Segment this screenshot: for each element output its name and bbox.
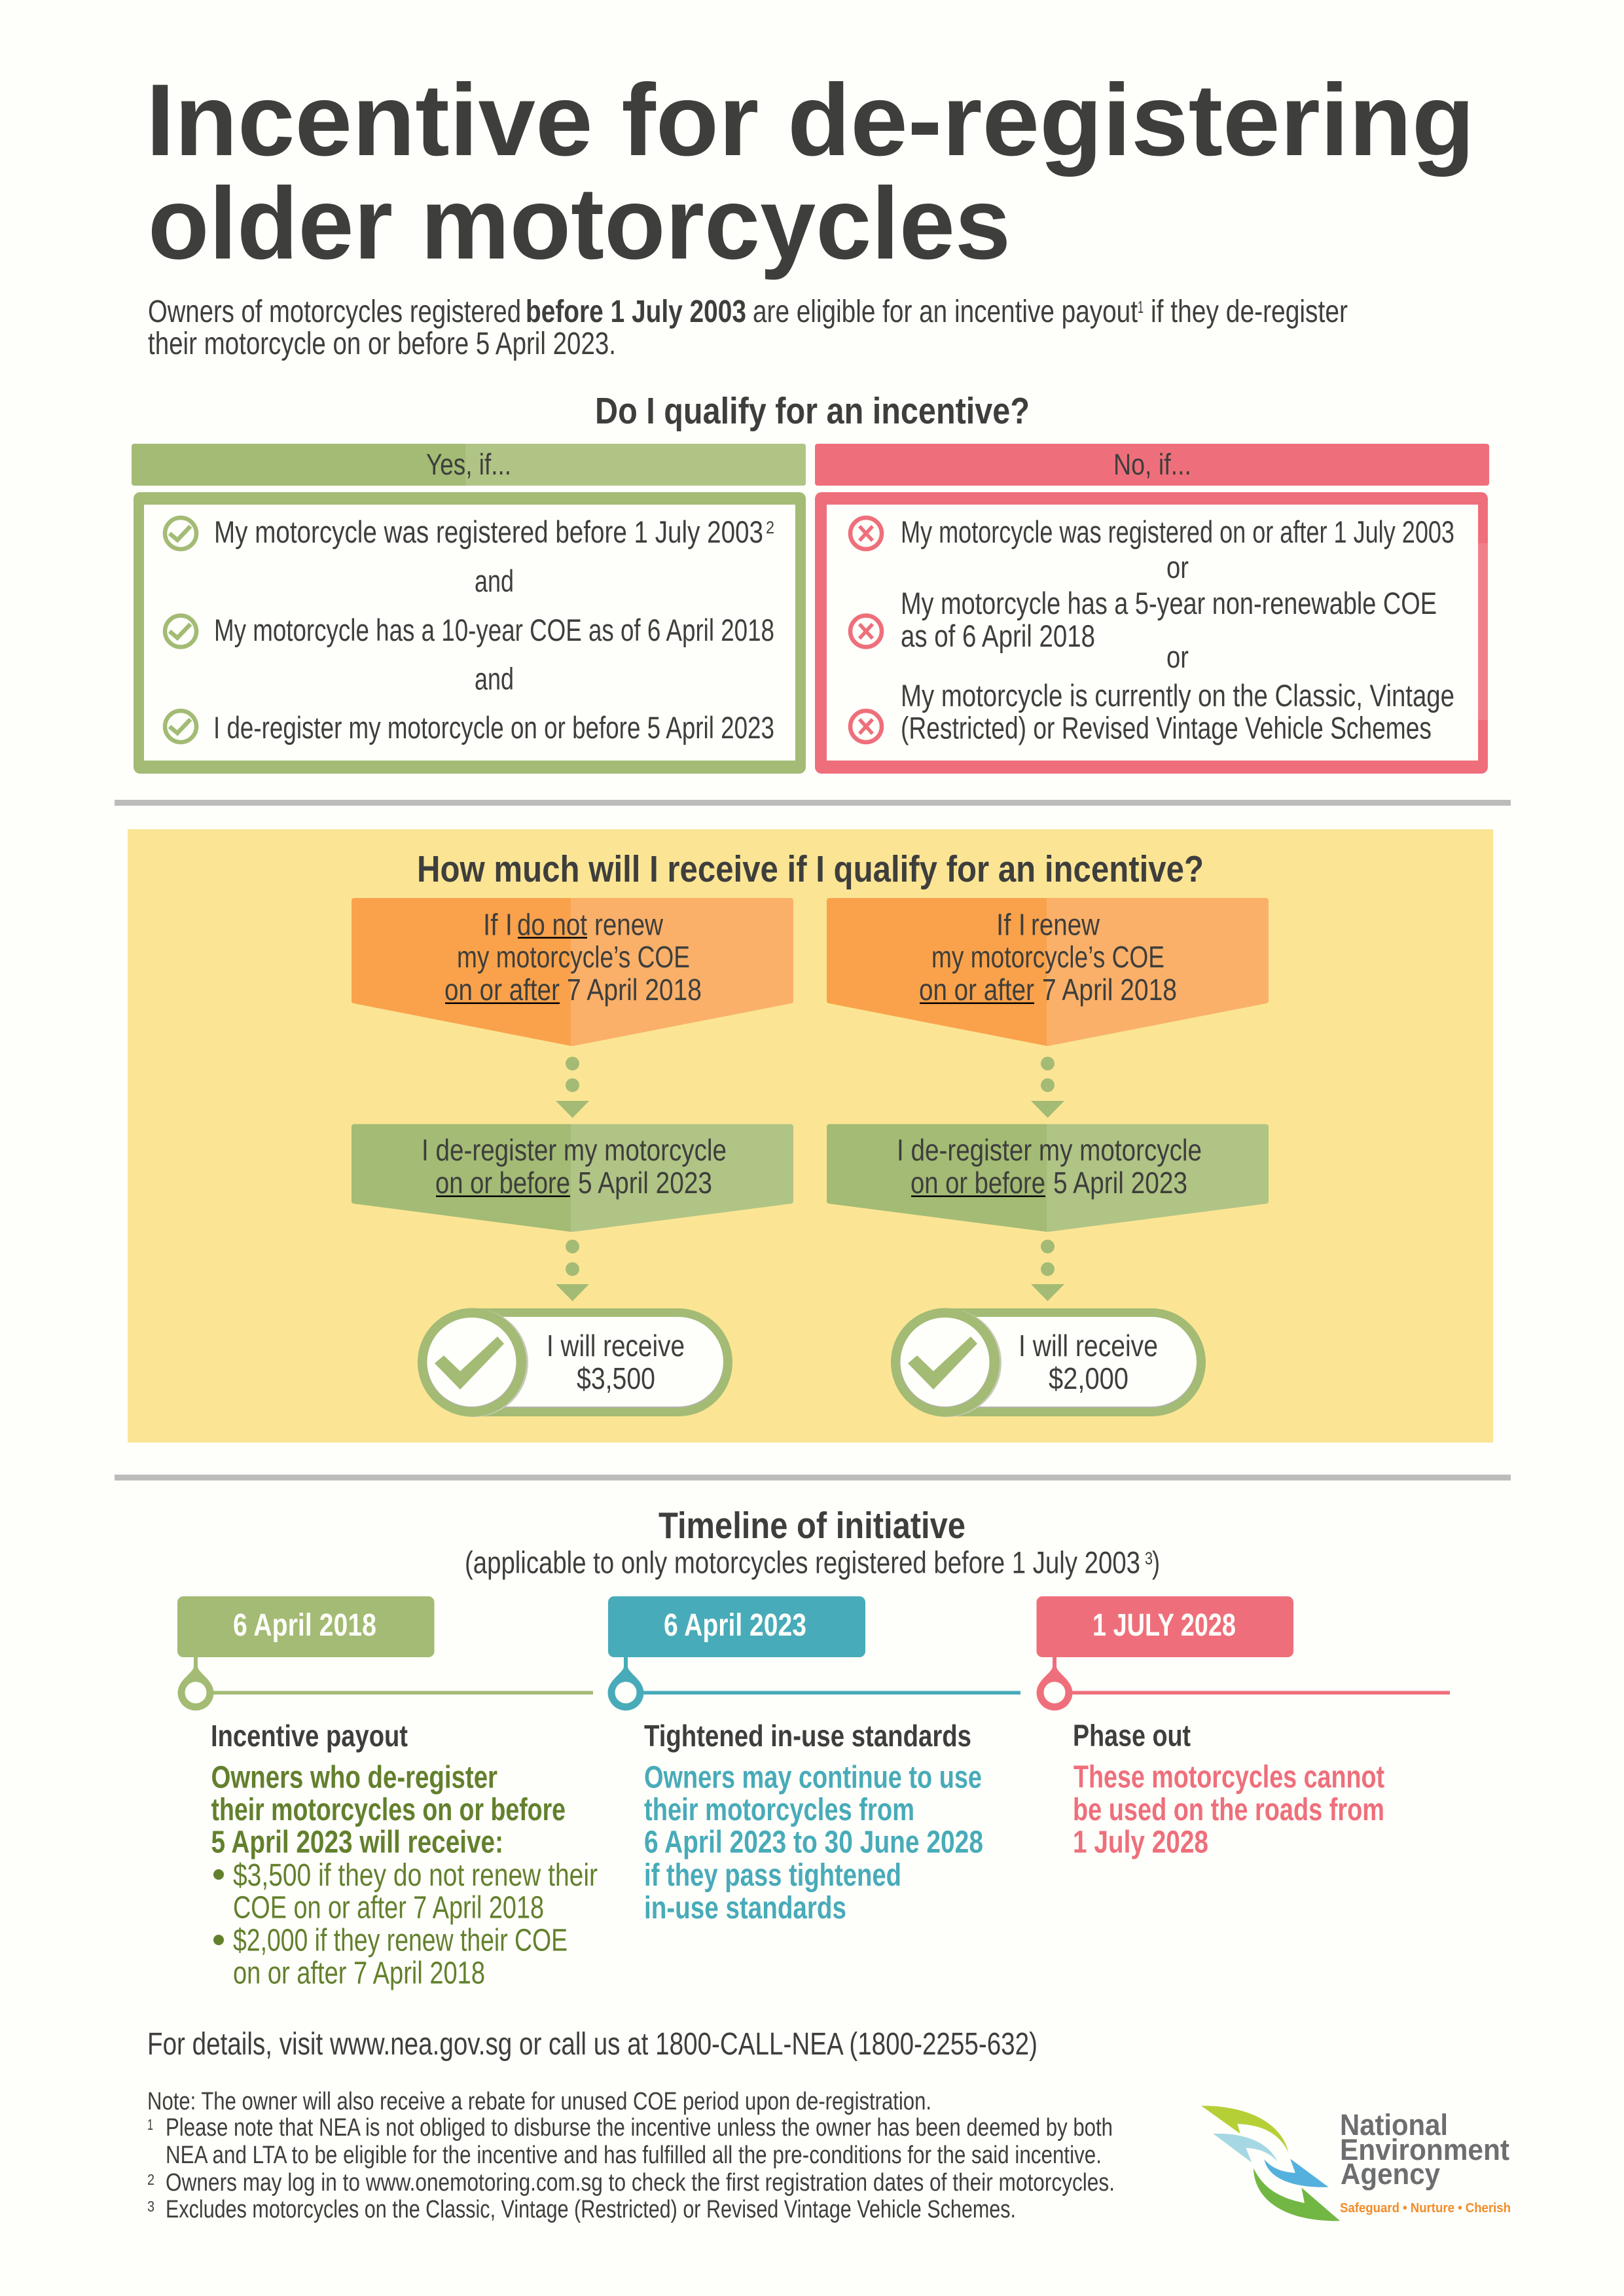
logo wordmark: Agency [1341,2157,1440,2191]
result pill: $2,000: $2,000 [1049,1361,1128,1395]
panel: how much [128,829,1493,1443]
timeline: 1 July 2028 [1037,1596,1450,1860]
pin and line [1037,1656,1450,1711]
date tag [177,1596,435,1657]
date tag [608,1596,865,1657]
condition 3: My motorcycle is currently on the Classic, Vintage [901,678,1454,713]
condition 1: My motorcycle was registered on or after 1 July 2003 [901,514,1454,549]
orange arrow box: If I [483,907,513,941]
footnotes: Excludes motorcycles on the Classic, Vintage (Restricted) or Revised Vintage Vehicle Schemes. [166,2196,1016,2223]
icon: check 2 [165,615,196,647]
icon: logo swirl [1201,2106,1340,2221]
icon: cross 2 [850,615,882,647]
result pill: $3,500 [418,1308,732,1417]
lead text [211,1761,566,1860]
heading: timeline [465,1505,1160,1580]
condition 2: My motorcycle has a 5-year non-renewable COE [901,586,1437,620]
result pill: $3,500: $3,500 [577,1361,655,1395]
green arrow box: on or before [435,1166,570,1200]
orange arrow box: renew [594,907,664,941]
heading: incentive payout: Incentive payout [211,1719,408,1753]
date tag [1037,1596,1293,1657]
title [146,63,1475,281]
title: Incentive for de-registering [146,63,1475,177]
no conditions box [815,492,1488,774]
green arrow box: on or before [911,1166,1045,1200]
contact line: For details, visit www.nea.gov.sg or call us at 1800-CALL-NEA (1800-2255-632) [147,2027,1038,2062]
green arrow box: 5 April 2023 [1053,1166,1187,1200]
date tag: 1 JULY 2028 [1092,1608,1236,1643]
orange arrow box: renew [1031,907,1100,941]
lead text: 1 July 2028 [1073,1825,1208,1860]
yes header bar [132,444,806,486]
intro text: are eligible for an incentive payout [753,295,1138,329]
arrow: dotted down [1031,1240,1064,1301]
lead text: 6 April 2023 to 30 June 2028 [644,1825,983,1860]
pin and line [178,1656,593,1711]
condition 3 [901,678,1454,745]
condition 2: My motorcycle has a 10-year COE as of 6 April 2018 [214,613,774,647]
orange arrow box: my motorcycle’s COE [931,940,1164,974]
title: older motorcycles [148,167,1011,281]
lead text: 5 April 2023 will receive: [211,1825,503,1860]
green arrow box: 5 April 2023 [578,1166,712,1200]
lead text: if they pass tightened [644,1858,901,1893]
orange arrow box: on or after [444,973,560,1007]
yes header bar: Yes, if... [426,448,511,481]
logo wordmark: Environment [1340,2133,1509,2166]
footnotes: NEA and LTA to be eligible for the incentive and has fulfilled all the pre-conditions for the said incentive. [166,2142,1102,2169]
bullets [213,1858,598,1991]
date tag: 6 April 2018 [233,1608,376,1643]
heading: timeline: ) [1152,1545,1160,1580]
orange arrow box: my motorcycle’s COE [457,940,690,974]
heading: how much: How much will I receive if I qualify for an incentive? [417,848,1204,890]
flow: left column [352,898,793,1417]
timeline: 6 April 2018 [177,1596,598,1991]
footnotes: Note: The owner will also receive a rebate for unused COE period upon de-registration. [147,2088,931,2115]
green arrow box: I de-register my motorcycle [897,1133,1202,1167]
green arrow box [827,1124,1269,1232]
green arrow box [352,1124,793,1232]
arrow: dotted down [1031,1056,1064,1118]
timeline: 6 April 2023 [607,1596,1020,1926]
footnotes: Please note that NEA is not obliged to disburse the incentive unless the owner has been deemed by both [166,2114,1113,2142]
icon: check 3 [165,711,196,742]
intro text: before 1 July 2003 [526,295,746,329]
orange arrow box: do not [517,907,587,941]
bullets: COE on or after 7 April 2018 [233,1890,544,1926]
lead text: These motorcycles cannot [1074,1760,1384,1795]
footnotes: 1 [147,2116,153,2133]
lead text [1073,1760,1384,1860]
heading: tightened standards: Tightened in-use standards [644,1719,971,1753]
footnotes: 2 [147,2171,154,2188]
yes conditions box: and [475,661,514,696]
footnotes [147,2088,1115,2223]
condition 1: 2 [766,518,774,537]
date tag: 6 April 2023 [664,1608,806,1643]
intro text: Owners of motorcycles registered [148,295,521,329]
heading: timeline: 3 [1145,1549,1153,1568]
intro text: 1 [1138,297,1144,317]
no conditions box: or [1166,550,1189,584]
icon: check 1 [165,518,196,549]
orange arrow box: on or after [919,973,1034,1007]
bullets: $3,500 if they do not renew their [233,1858,598,1893]
pin and line [607,1656,1020,1711]
result pill: $2,000: I will receive [1019,1329,1158,1363]
orange arrow box [352,898,793,1046]
heading: timeline: (applicable to only motorcycles registered before 1 July 2003 [465,1545,1140,1580]
logo wordmark: National [1340,2108,1448,2142]
logo: National Environment Agency [1201,2106,1511,2221]
panel: no [815,444,1489,774]
footnotes: Owners may log in to www.onemotoring.com.sg to check the first registration dates of their motorcycles. [166,2169,1115,2197]
yes conditions box [134,492,806,774]
lead text: Owners who de-register [211,1761,497,1795]
arrow: dotted down [556,1056,589,1118]
condition 3: I de-register my motorcycle on or before 5 April 2023 [213,710,774,745]
result pill: $2,000 [891,1308,1206,1417]
no conditions box: or [1166,639,1189,674]
lead text [644,1761,983,1926]
orange arrow box: If I [996,907,1026,941]
lead text: in-use standards [644,1891,846,1926]
condition 2 [901,586,1437,653]
heading: phase out: Phase out [1073,1719,1191,1753]
arrow: dotted down [556,1240,589,1301]
icon: cross 1 [850,518,882,549]
heading: do I qualify: Do I qualify for an incentive? [595,390,1030,432]
lead text: their motorcycles from [644,1793,914,1827]
intro text: if they de-register [1151,295,1348,329]
logo tagline: Safeguard • Nurture • Cherish [1340,2201,1511,2215]
footnotes: 3 [147,2198,154,2215]
intro text: their motorcycle on or before 5 April 2023. [148,327,616,361]
condition 1: My motorcycle was registered before 1 July 2003 [214,514,763,549]
bullets: on or after 7 April 2018 [233,1956,485,1991]
lead text: Owners may continue to use [644,1761,982,1795]
intro text [148,295,1348,361]
condition 3: (Restricted) or Revised Vintage Vehicle Schemes [901,711,1432,745]
no header bar [815,444,1489,486]
logo wordmark [1340,2108,1509,2191]
lead text: be used on the roads from [1073,1793,1384,1827]
orange arrow box: 7 April 2018 [1042,973,1177,1007]
result pill: $3,500: I will receive [547,1329,685,1363]
orange arrow box [827,898,1269,1046]
orange arrow box: 7 April 2018 [567,973,702,1007]
panel: yes [132,444,806,774]
no header bar: No, if... [1113,448,1191,481]
condition 2: as of 6 April 2018 [901,619,1095,653]
bullets: $2,000 if they renew their COE [233,1923,568,1958]
lead text: their motorcycles on or before [211,1793,566,1827]
flow: right column [827,898,1269,1417]
heading: timeline: Timeline of initiative [659,1505,965,1547]
icon: cross 3 [850,711,882,742]
green arrow box: I de-register my motorcycle [422,1133,727,1167]
yes conditions box: and [475,564,514,598]
